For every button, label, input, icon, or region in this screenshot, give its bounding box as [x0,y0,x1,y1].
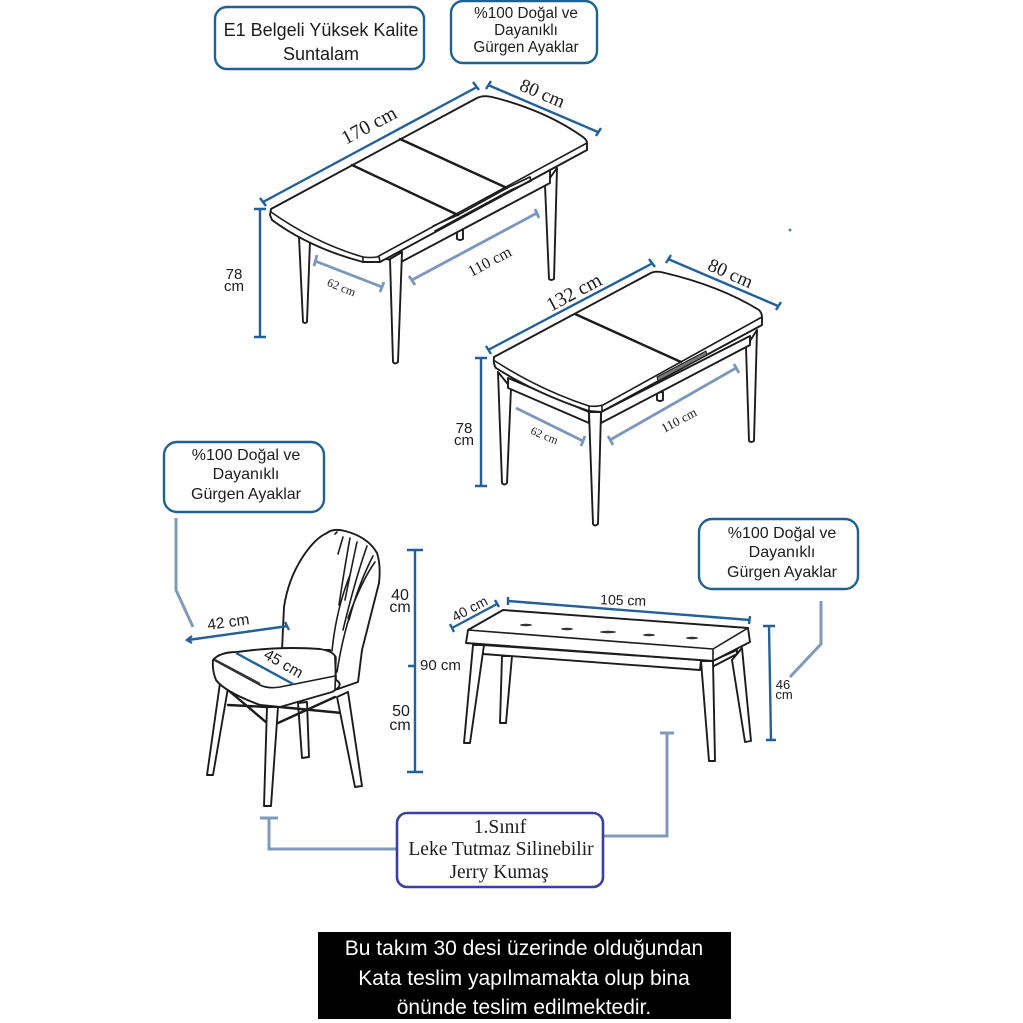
dimension: chair height: 50 [392,703,410,720]
dimensions: small table: cm [454,432,474,449]
dimensions: large table: 110 cm [465,243,515,281]
callout: hornbeam legs, top: Gürgen Ayaklar [473,39,579,56]
bench seat [466,610,750,661]
dimensions: large table: 78 [226,266,242,283]
table legs [299,168,557,364]
chair labels: 42 cm [206,611,250,634]
callout: hornbeam legs, bench [699,519,858,589]
callout: E1 particle board: Suntalam [283,44,359,64]
connector: fabric to chair [260,818,397,849]
chair back [282,530,380,690]
dimensions: bench: 46 [776,677,790,692]
table top [494,272,762,412]
callout: fabric: Leke Tutmaz Silinebilir [408,839,594,860]
dimension: chair height [389,550,461,772]
table top [270,96,587,262]
bench legs [464,645,751,761]
connector: fabric to bench [603,733,674,836]
dimensions: large table: 62 cm [325,275,358,300]
dimensions: large table: 80 cm [516,75,568,113]
dimension: chair height: 90 cm [420,657,461,674]
stray dot [788,228,792,232]
dimensions: small table: 110 cm [659,404,699,436]
callout: fabric: 1.Sınıf [474,817,527,838]
dimensions: small table: 78 [456,420,472,437]
callout: hornbeam legs, chair [164,442,324,512]
large extended table [270,96,587,363]
chair [187,530,380,806]
callout: hornbeam legs, bench: Gürgen Ayaklar [727,564,838,581]
dimensions: small table: 62 cm [529,425,560,447]
dimensions: bench: 105 cm [600,591,646,609]
chair labels: 45 cm [261,646,306,682]
dimension: chair height: 40 [391,587,409,604]
callout: hornbeam legs, chair: Dayanıklı [213,466,279,483]
table seam lines [352,139,507,215]
callout: hornbeam legs, chair: %100 Doğal ve [192,447,300,464]
dimensions: small table [454,255,781,486]
callout: fabric: Jerry Kumaş [449,862,549,883]
callout: hornbeam legs, top: %100 Doğal ve [474,5,578,22]
dimension: chair height: cm [389,717,411,734]
table legs [498,330,757,526]
connector: bench legs callout [790,601,821,677]
notice banner [318,932,731,1019]
chair dimension lines [187,622,293,684]
table seam and slide [575,314,681,362]
dimensions: large table: 170 cm [338,102,401,149]
small table [494,272,762,526]
dimensions: bench: 40 cm [449,593,490,625]
notice banner: Bu takım 30 desi üzerinde olduğundan [345,937,703,960]
callout: E1 particle board: E1 Belgeli Yüksek Kalite [224,20,418,40]
notice banner: Kata teslim yapılmamakta olup bina [358,967,690,990]
connector: chair legs callout [176,518,193,627]
chair legs [207,683,362,806]
chair pleats [332,532,375,672]
callout: hornbeam legs, bench: %100 Doğal ve [728,525,836,542]
notice banner: önünde teslim edilmektedir. [397,996,651,1019]
callout: hornbeam legs, top: Dayanıklı [494,22,558,39]
dimension: chair height: cm [389,599,411,616]
callout: hornbeam legs, chair: Gürgen Ayaklar [191,486,302,503]
callout: hornbeam legs, top [451,1,597,63]
bench [464,610,751,761]
chair labels [206,611,306,682]
dimensions: small table: 132 cm [543,269,606,316]
dimensions: bench: cm [775,687,793,702]
callout: E1 particle board [215,7,424,69]
bench tufts [520,624,698,639]
dimensions: large table: cm [224,278,244,295]
dimensions: large table [224,75,601,337]
chair seat [213,648,340,707]
callout: hornbeam legs, bench: Dayanıklı [749,544,815,561]
callout: fabric [397,813,603,887]
dimensions: bench [449,591,793,740]
dimensions: small table: 80 cm [705,255,756,293]
